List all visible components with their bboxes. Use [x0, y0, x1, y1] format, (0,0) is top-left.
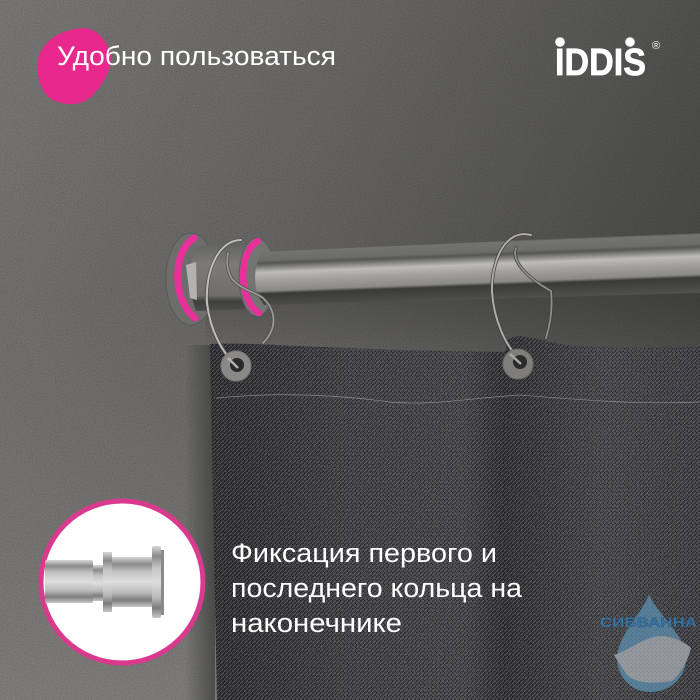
curtain	[185, 330, 700, 700]
inset detail circle	[41, 501, 203, 663]
watermark: СИБВАННА	[600, 594, 697, 692]
caption: последнего кольца на	[231, 573, 523, 603]
heading: Удобно пользоваться	[57, 41, 336, 71]
caption: Фиксация первого и	[231, 538, 497, 568]
pink blob	[38, 28, 111, 104]
first flange	[166, 233, 216, 325]
pink mark on first flange	[178, 238, 195, 318]
wall shadow under rod	[205, 290, 700, 350]
first grommet	[221, 351, 251, 381]
caption: наконечнике	[231, 608, 402, 638]
pink mark on second flange	[243, 241, 259, 313]
inset rod illustration	[45, 546, 164, 618]
second grommet	[503, 349, 533, 379]
logo: IDDIS: IDDIS	[555, 42, 646, 84]
second flange	[239, 238, 275, 316]
caption	[231, 538, 523, 638]
collar between flanges	[190, 240, 250, 311]
logo: IDDIS: ®	[652, 40, 660, 52]
watermark: СИБВАННА: СИБВАННА	[600, 614, 697, 630]
first curtain ring	[207, 240, 274, 364]
shower rod	[255, 232, 700, 305]
end cap with pink marks	[166, 233, 275, 325]
second curtain ring	[492, 234, 552, 360]
